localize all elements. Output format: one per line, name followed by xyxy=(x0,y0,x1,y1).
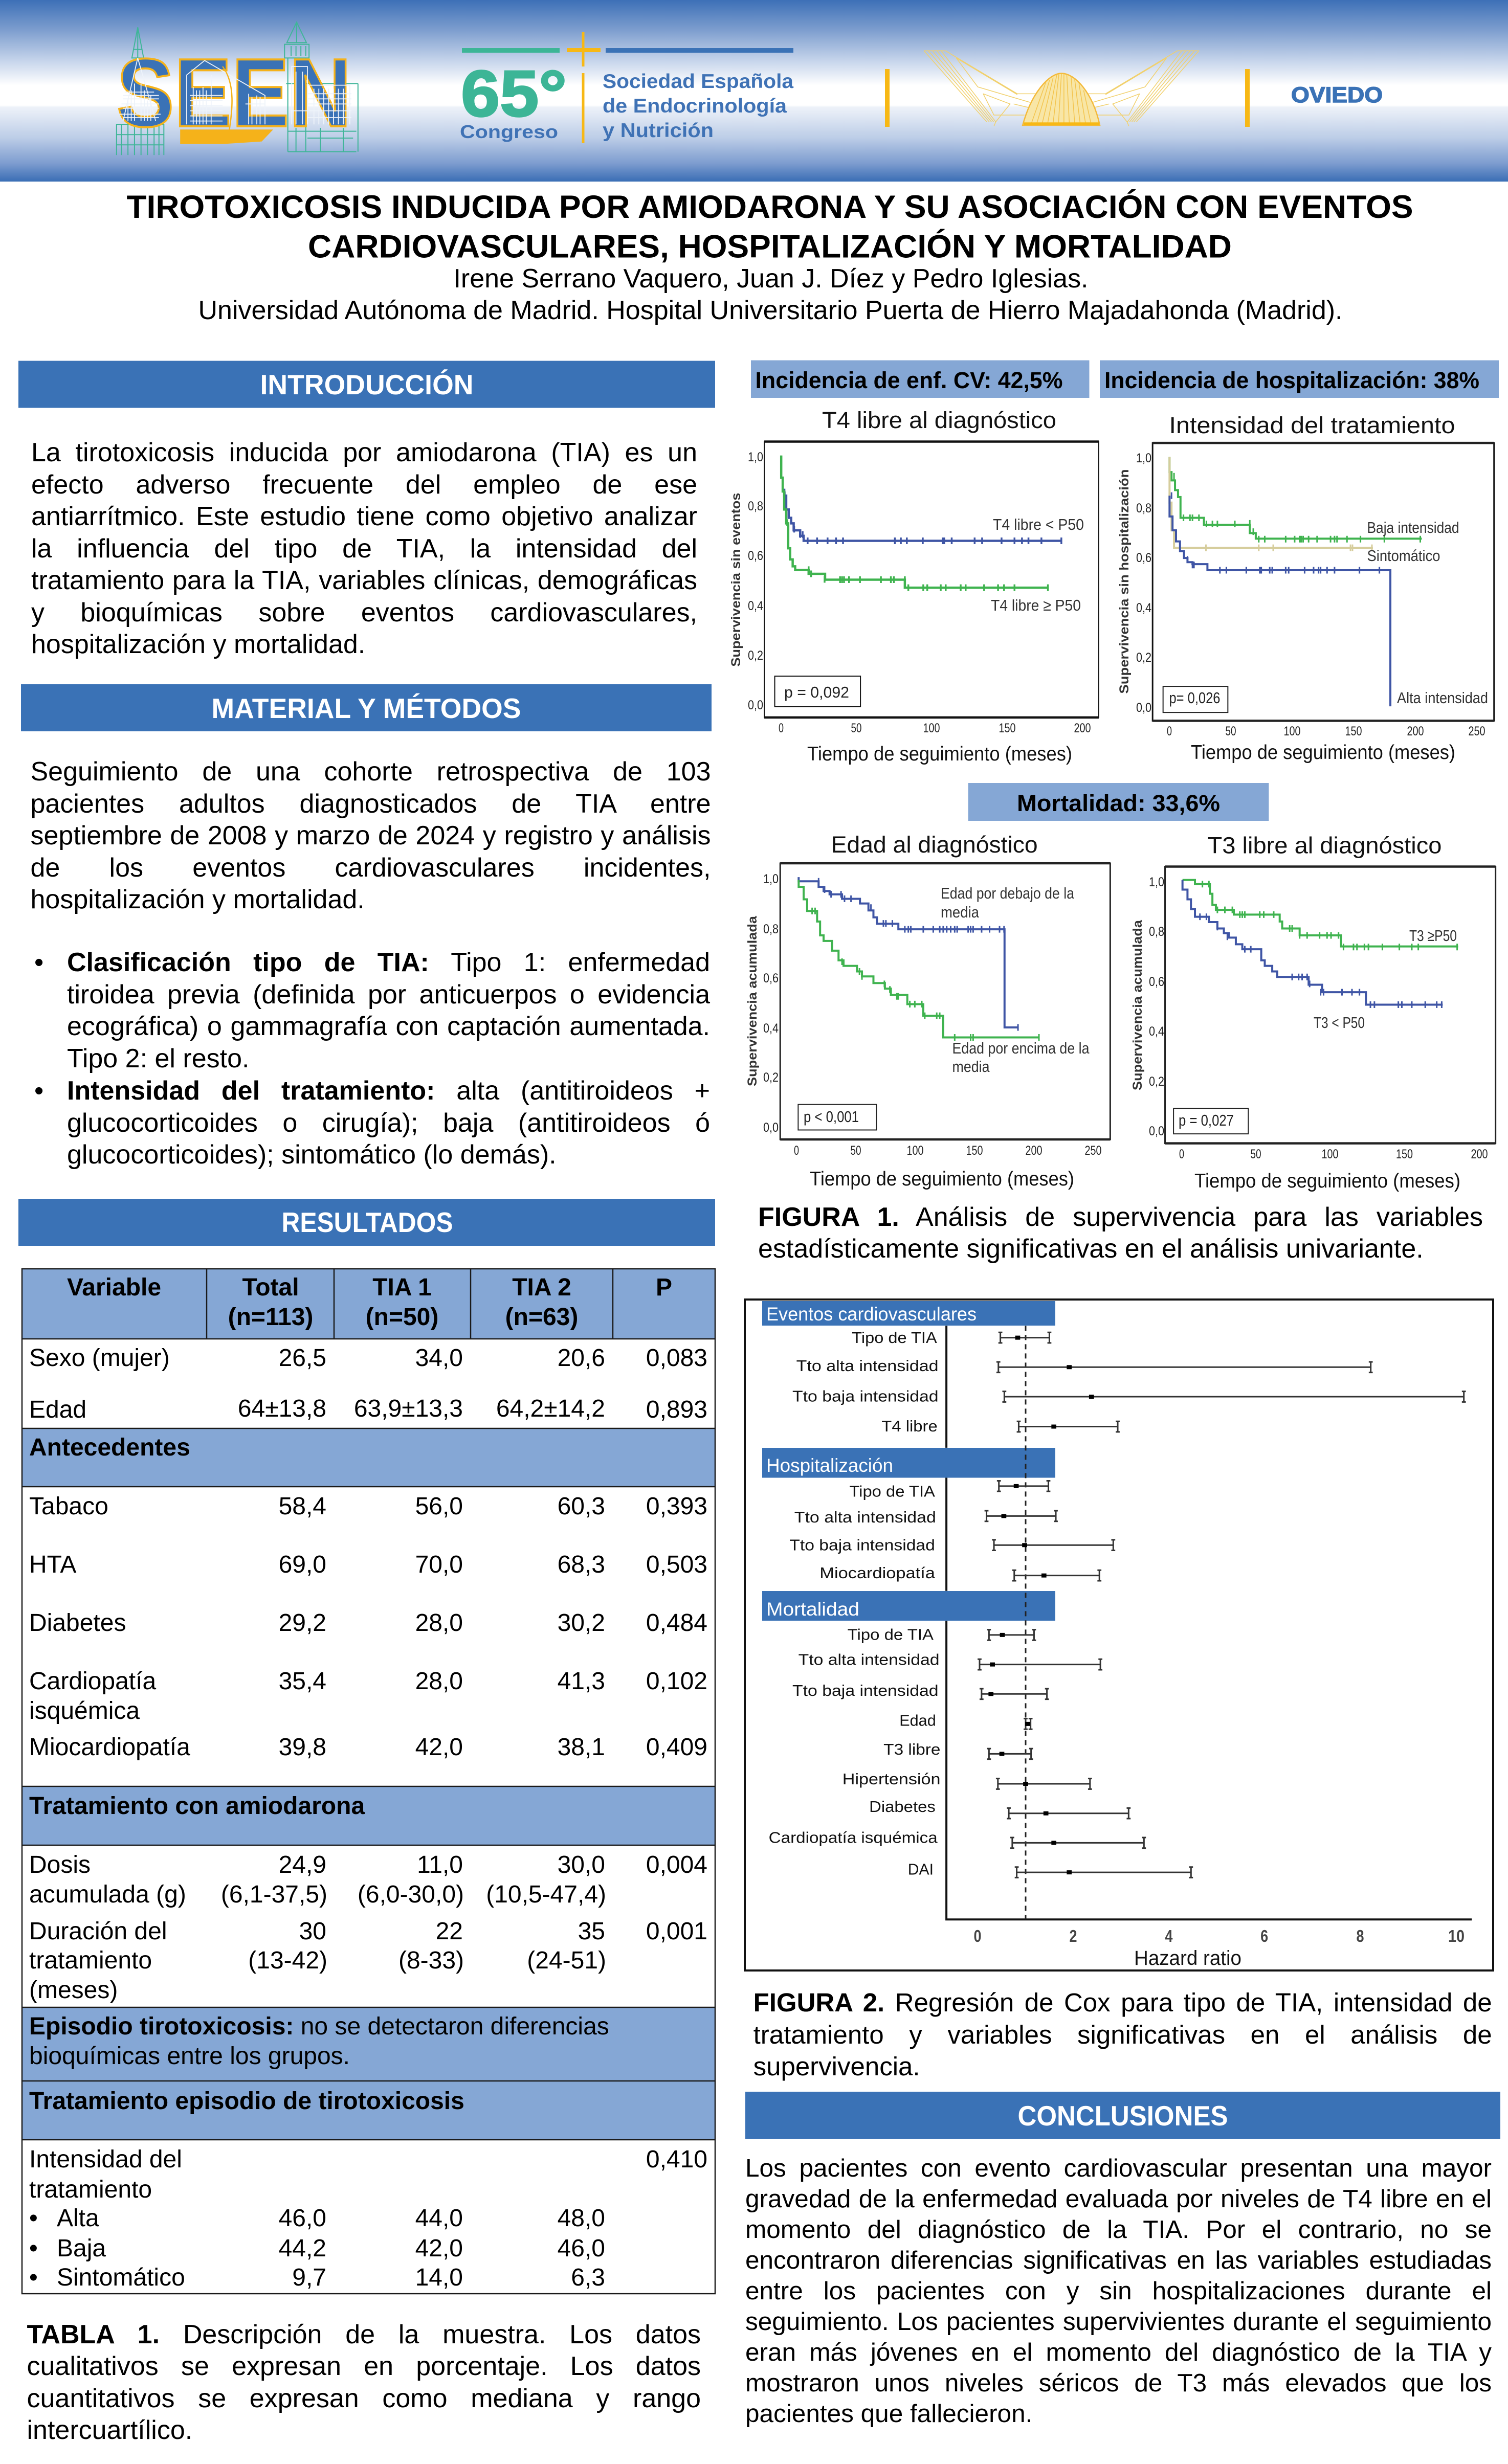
table rows: demographics: Edad xyxy=(29,1396,86,1423)
table rows: demographics: 64,2±14,2 xyxy=(496,1395,605,1422)
chart: intensidad del tratamiento: 0 xyxy=(1167,724,1172,738)
table rows: demographics: Sexo (mujer) xyxy=(29,1345,170,1372)
chart: forest plot of hazard ratios: Diabetes xyxy=(869,1798,936,1816)
chart: edad al diagnóstico: Edad por debajo de la xyxy=(941,884,1075,902)
chart: edad al diagnóstico: 150 xyxy=(966,1144,983,1158)
table rows: antecedentes: 60,3 xyxy=(558,1493,605,1520)
chart: forest plot of hazard ratios: 8 xyxy=(1357,1927,1364,1945)
text: material y métodos: Seguimiento de una cohorte retrospectiva de 103 xyxy=(31,757,711,787)
chart: edad al diagnóstico: 50 xyxy=(850,1144,861,1158)
chart: forest plot of hazard ratios: Tto alta intensidad xyxy=(794,1508,936,1526)
chart: edad al diagnóstico: Edad al diagnóstico xyxy=(831,832,1038,858)
logo: SEEN with buildings: SEEN xyxy=(117,39,351,147)
chart: intensidad del tratamiento: 150 xyxy=(1345,724,1362,738)
table rows: tratamiento con amiodarona: 24,9 xyxy=(279,1851,326,1878)
chart: forest plot of hazard ratios: 4 xyxy=(1165,1927,1173,1945)
bullet: clasificación tipo de TIA: ecográfica) o gammagrafía con captación aumentada. xyxy=(67,1012,710,1041)
text: conclusiones: seguimiento. Los pacientes supervivientes durante el seguimiento xyxy=(745,2308,1492,2336)
table rows: antecedentes: 0,484 xyxy=(646,1609,707,1637)
chart: edad al diagnóstico: 250 xyxy=(1084,1144,1102,1158)
chart: T3 libre al diagnóstico: T3 ≥P50 xyxy=(1409,927,1457,945)
chart: edad al diagnóstico: 0,6 xyxy=(763,971,779,985)
chart: intensidad del tratamiento: Sintomático xyxy=(1367,547,1440,565)
table rows: intensidad del tratamiento: Intensidad del xyxy=(29,2146,182,2173)
heading: introducción xyxy=(18,361,715,408)
table rows: antecedentes: 70,0 xyxy=(415,1551,463,1578)
chart: T4 libre al diagnóstico: T4 libre al diagnóstico xyxy=(822,407,1056,433)
table rows: antecedentes: HTA xyxy=(29,1551,76,1578)
table rows: tratamiento con amiodarona xyxy=(29,1793,707,2004)
caption: figura 1: estadísticamente significativas en el análisis univariante. xyxy=(758,1234,1424,1264)
table rows: episodio tirotoxicosis: bioquímicas entre los grupos. xyxy=(29,2043,350,2070)
heading: conclusiones xyxy=(745,2092,1500,2139)
chart: T4 libre al diagnóstico: 150 xyxy=(999,721,1016,735)
chart: T3 libre al diagnóstico: 1,0 xyxy=(1149,875,1164,889)
table rows: demographics: 20,6 xyxy=(558,1345,605,1372)
chart: edad al diagnóstico: Tiempo de seguimiento (meses) xyxy=(810,1168,1074,1190)
table rows: antecedentes: 39,8 xyxy=(279,1734,326,1761)
logo: 65 congreso: Congreso xyxy=(460,121,558,142)
table rows: antecedentes: 28,0 xyxy=(415,1609,463,1637)
chart: T4 libre al diagnóstico: 0,4 xyxy=(748,599,763,613)
heading: resultados xyxy=(18,1199,715,1246)
chart: forest plot of hazard ratios: Cardiopatía isquémica xyxy=(769,1829,938,1846)
text: conclusiones: gravedad de la enfermedad evaluada por niveles de T4 libre en el xyxy=(745,2185,1492,2213)
table rows: demographics: 64±13,8 xyxy=(238,1395,326,1422)
caption: tabla 1: TABLA 1. Descripción de la muestra. Los datos xyxy=(27,2320,701,2349)
caption: tabla 1 xyxy=(27,2320,701,2445)
table rows: intensidad del tratamiento: 44,0 xyxy=(415,2205,463,2232)
table rows: antecedentes: 56,0 xyxy=(415,1493,463,1520)
bullet: intensidad del tratamiento: Intensidad del tratamiento: alta (antitiroideos + xyxy=(67,1076,710,1106)
chart: edad al diagnóstico: 0,2 xyxy=(763,1070,779,1085)
stat box: mortalidad xyxy=(968,783,1269,821)
table rows: antecedentes: 42,0 xyxy=(415,1734,463,1761)
chart: forest plot of hazard ratios: 2 xyxy=(1069,1927,1077,1945)
table rows: tratamiento con amiodarona: acumulada (g) xyxy=(29,1881,186,1908)
chart: edad al diagnóstico: media xyxy=(941,903,980,921)
chart: T4 libre al diagnóstico: 0 xyxy=(779,721,784,735)
text: introducción: tratamiento para la TIA, variables clínicas, demográficas xyxy=(31,566,697,595)
chart: forest plot of hazard ratios: 6 xyxy=(1260,1927,1268,1945)
chart: intensidad del tratamiento: Alta intensidad xyxy=(1397,689,1488,707)
title xyxy=(127,189,1413,265)
table rows: tratamiento con amiodarona: 0,001 xyxy=(646,1918,707,1945)
chart: edad al diagnóstico: 0,4 xyxy=(763,1021,779,1036)
text: conclusiones: eran más jóvenes en el momento del diagnóstico de la TIA y xyxy=(745,2338,1492,2366)
table rows: intensidad del tratamiento: 46,0 xyxy=(558,2235,605,2262)
chart: T3 libre al diagnóstico: 0,4 xyxy=(1149,1024,1164,1039)
chart: intensidad del tratamiento: 100 xyxy=(1284,724,1300,738)
bullet: intensidad del tratamiento: glucocorticoides); sintomático (lo demás). xyxy=(67,1140,557,1170)
table rows: intensidad del tratamiento: 42,0 xyxy=(415,2235,463,2262)
table rows: tratamiento con amiodarona: (6,0-30,0) xyxy=(358,1881,464,1908)
chart: forest plot of hazard ratios: T3 libre xyxy=(883,1740,940,1758)
table rows: tratamiento con amiodarona: 30,0 xyxy=(558,1851,605,1878)
heading: introducción: INTRODUCCIÓN xyxy=(260,369,474,400)
chart: T3 libre al diagnóstico: Supervivencia acumulada xyxy=(1130,920,1145,1090)
chart: forest plot of hazard ratios: Tto alta intensidad xyxy=(796,1357,939,1375)
table rows: antecedentes: 30,2 xyxy=(558,1609,605,1637)
chart: T4 libre al diagnóstico: 200 xyxy=(1074,721,1091,735)
text: conclusiones: Los pacientes con evento cardiovascular presentan una mayor xyxy=(745,2154,1492,2182)
chart: forest plot of hazard ratios: Tto alta intensidad xyxy=(799,1651,940,1669)
chart: T3 libre al diagnóstico: 150 xyxy=(1396,1147,1413,1161)
text: material y métodos: de los eventos cardiovasculares incidentes, xyxy=(31,853,711,883)
chart: intensidad del tratamiento: 0,6 xyxy=(1136,551,1151,565)
table rows: episodio tirotoxicosis: Episodio tirotoxicosis: no se detectaron diferencias xyxy=(29,2013,609,2040)
table rows: tratamiento con amiodarona: (10,5-47,4) xyxy=(486,1881,606,1908)
text: material y métodos: septiembre de 2008 y marzo de 2024 y registro y análisis xyxy=(31,821,711,850)
table header: Variable xyxy=(67,1274,161,1301)
chart: intensidad del tratamiento: 50 xyxy=(1226,724,1236,738)
table rows: tratamiento con amiodarona: 11,0 xyxy=(417,1851,463,1878)
table rows: antecedentes: Tabaco xyxy=(29,1493,108,1520)
table header: TIA 2 xyxy=(512,1274,571,1301)
bullet: clasificación tipo de TIA: Tipo 2: el resto. xyxy=(67,1044,249,1073)
logo: OVIEDO: OVIEDO xyxy=(1291,83,1383,107)
heading: resultados: RESULTADOS xyxy=(281,1206,453,1238)
table header: P xyxy=(656,1274,672,1301)
table rows: antecedentes: Antecedentes xyxy=(29,1434,190,1461)
chart: intensidad del tratamiento: 200 xyxy=(1407,724,1424,738)
text: material y métodos xyxy=(31,757,711,914)
stat box: cardiovascular incidence xyxy=(751,360,1090,398)
heading: material y métodos xyxy=(21,684,712,731)
caption: tabla 1: cualitativos se expresan en porcentaje. Los datos xyxy=(27,2351,701,2381)
table rows: intensidad del tratamiento: Sintomático xyxy=(57,2264,185,2291)
chart: intensidad del tratamiento: Supervivencia sin hospitalización xyxy=(1117,469,1132,693)
text: material y métodos: pacientes adultos diagnosticados de TIA entre xyxy=(31,789,711,818)
group header: hospitalización xyxy=(762,1448,1055,1478)
title: TIROTOXICOSIS INDUCIDA POR AMIODARONA Y SU ASOCIACIÓN CON EVENTOS xyxy=(127,189,1413,225)
chart: T3 libre al diagnóstico: 0,2 xyxy=(1149,1074,1164,1089)
title: CARDIOVASCULARES, HOSPITALIZACIÓN Y MORTALIDAD xyxy=(308,229,1232,265)
chart: edad al diagnóstico: 1,0 xyxy=(763,872,779,886)
table rows: antecedentes: Diabetes xyxy=(29,1609,126,1637)
group header: eventos cardiovasculares: Eventos cardiovasculares xyxy=(766,1304,977,1325)
chart: T3 libre al diagnóstico: 50 xyxy=(1250,1147,1261,1161)
table rows: antecedentes: 38,1 xyxy=(558,1734,605,1761)
chart: T4 libre al diagnóstico: Tiempo de seguimiento (meses) xyxy=(807,743,1072,765)
heading: conclusiones: CONCLUSIONES xyxy=(1018,2100,1228,2132)
table rows: intensidad del tratamiento: • xyxy=(29,2205,38,2232)
group header: eventos cardiovasculares xyxy=(762,1301,1055,1326)
chart: intensidad del tratamiento: p= 0,026 xyxy=(1169,689,1221,707)
chart: T3 libre al diagnóstico: 100 xyxy=(1322,1147,1338,1161)
table rows: tratamiento con amiodarona: Dosis xyxy=(29,1851,91,1878)
chart: T3 libre al diagnóstico: 200 xyxy=(1471,1147,1488,1161)
bullet: intensidad del tratamiento: glucocorticoides o cirugía); baja (antitiroideos ó xyxy=(67,1108,710,1138)
chart: forest plot of hazard ratios: 10 xyxy=(1448,1927,1465,1945)
chart: T4 libre al diagnóstico: 1,0 xyxy=(748,450,763,464)
table rows: intensidad del tratamiento: 46,0 xyxy=(279,2205,326,2232)
chart: T3 libre al diagnóstico: 0,8 xyxy=(1149,925,1164,939)
table rows: antecedentes: 35,4 xyxy=(279,1668,326,1695)
chart: edad al diagnóstico xyxy=(745,832,1110,1190)
chart: T4 libre al diagnóstico: 0,0 xyxy=(748,698,763,712)
table rows: demographics: 0,893 xyxy=(646,1396,707,1423)
group header: mortalidad: Mortalidad xyxy=(766,1599,859,1620)
table rows: antecedentes: 0,409 xyxy=(646,1734,707,1761)
text: material y métodos: hospitalización y mortalidad. xyxy=(31,885,365,914)
logo: 65 congreso: Sociedad Española xyxy=(603,71,793,93)
text: • xyxy=(34,1076,43,1106)
authors and affiliation xyxy=(198,264,1342,325)
chart: edad al diagnóstico: media xyxy=(952,1058,990,1076)
caption: figura 1: FIGURA 1. Análisis de supervivencia para las variables xyxy=(758,1202,1483,1232)
chart: T3 libre al diagnóstico: T3 libre al diagnóstico xyxy=(1207,833,1442,858)
text: introducción: efecto adverso frecuente del empleo de ese xyxy=(31,469,697,499)
table rows: antecedentes: 68,3 xyxy=(558,1551,605,1578)
group header: mortalidad xyxy=(762,1591,1055,1621)
text: introducción: La tirotoxicosis inducida por amiodarona (TIA) es un xyxy=(31,438,697,467)
chart: edad al diagnóstico: 0,8 xyxy=(763,922,779,936)
text: introducción: y bioquímicas sobre eventos cardiovasculares, xyxy=(31,597,697,627)
text: conclusiones: entre los pacientes con y sin hospitalizaciones durante el xyxy=(745,2277,1492,2305)
chart: T4 libre al diagnóstico: 0,8 xyxy=(748,499,763,513)
table bands xyxy=(22,1428,715,2140)
chart: T4 libre al diagnóstico: 50 xyxy=(851,721,861,735)
table rows: tratamiento con amiodarona: (13-42) xyxy=(248,1947,327,1974)
table rows: antecedentes: 58,4 xyxy=(279,1493,326,1520)
caption: tabla 1: intercuartílico. xyxy=(27,2415,192,2445)
chart: T4 libre al diagnóstico: 100 xyxy=(923,721,940,735)
logo: Oviedo building xyxy=(885,51,1250,127)
text: introducción xyxy=(31,438,697,659)
chart: forest plot of hazard ratios: 0 xyxy=(974,1927,981,1945)
table rows: tratamiento con amiodarona: 35 xyxy=(578,1918,605,1945)
chart: forest plot of hazard ratios: DAI xyxy=(908,1861,934,1878)
chart: edad al diagnóstico: 100 xyxy=(906,1144,924,1158)
stat box: hospitalization incidence: Incidencia de hospitalización: 38% xyxy=(1104,367,1479,393)
table rows: antecedentes: Miocardiopatía xyxy=(29,1734,190,1761)
table rows: intensidad del tratamiento: Alta xyxy=(57,2205,99,2232)
table rows: antecedentes xyxy=(29,1434,707,1761)
table rows: intensidad del tratamiento: • xyxy=(29,2264,38,2291)
text: introducción: antiarrítmico. Este estudio tiene como objetivo analizar xyxy=(31,502,697,531)
chart: edad al diagnóstico: 0,0 xyxy=(763,1121,779,1135)
chart: forest plot of hazard ratios: Tto baja intensidad xyxy=(792,1682,939,1699)
chart: T3 libre al diagnóstico: p = 0,027 xyxy=(1179,1111,1234,1129)
table rows: tratamiento con amiodarona: (8-33) xyxy=(398,1947,464,1974)
authors and affiliation: Universidad Autónoma de Madrid. Hospital Universitario Puerta de Hierro Majadahonda (Madrid). xyxy=(198,296,1342,325)
table rows: tratamiento con amiodarona: tratamiento xyxy=(29,1947,152,1974)
table rows: antecedentes: isquémica xyxy=(29,1697,140,1724)
logo: 65 congreso: y Nutrición xyxy=(603,120,714,142)
table rows: intensidad del tratamiento: 9,7 xyxy=(292,2264,326,2291)
text: introducción: hospitalización y mortalidad. xyxy=(31,630,365,659)
chart: forest plot of hazard ratios: Tipo de TIA xyxy=(852,1329,937,1347)
bullet: intensidad del tratamiento xyxy=(34,1076,710,1170)
text: • xyxy=(34,948,43,977)
table rows: episodio tirotoxicosis xyxy=(29,2013,609,2115)
bullet: clasificación tipo de TIA: tiroidea previa (definida por anticuerpos o evidencia xyxy=(67,980,710,1010)
table rows: antecedentes: 0,503 xyxy=(646,1551,707,1578)
stat box: cardiovascular incidence: Incidencia de enf. CV: 42,5% xyxy=(755,367,1063,393)
chart: intensidad del tratamiento: Baja intensidad xyxy=(1367,519,1459,536)
chart: T3 libre al diagnóstico: 0,6 xyxy=(1149,975,1164,989)
chart: forest plot of hazard ratios: Edad xyxy=(899,1711,936,1729)
logo: 65 congreso: de Endocrinología xyxy=(603,95,787,117)
chart: T3 libre al diagnóstico: T3 < P50 xyxy=(1314,1014,1365,1032)
chart: intensidad del tratamiento: 0,0 xyxy=(1136,701,1151,715)
table rows: tratamiento con amiodarona: Tratamiento con amiodarona xyxy=(29,1793,365,1820)
chart: forest plot of hazard ratios: Miocardiopatía xyxy=(819,1564,936,1582)
chart: forest plot of hazard ratios: T4 libre xyxy=(881,1417,938,1435)
chart: T3 libre al diagnóstico xyxy=(1130,833,1496,1192)
table rows: tratamiento con amiodarona: (24-51) xyxy=(527,1947,606,1974)
chart: T4 libre al diagnóstico: Supervivencia sin eventos xyxy=(729,493,743,667)
chart: T4 libre al diagnóstico: T4 libre < P50 xyxy=(993,516,1084,533)
table rows: tratamiento con amiodarona: Duración del xyxy=(29,1918,167,1945)
table header xyxy=(22,1269,715,1339)
table rows: antecedentes: 69,0 xyxy=(279,1551,326,1578)
text: conclusiones: encontraron diferencias significativas en las variables estudiadas xyxy=(745,2246,1492,2274)
table rows: intensidad del tratamiento: 48,0 xyxy=(558,2205,605,2232)
table header: (n=50) xyxy=(366,1304,438,1331)
table rows: intensidad del tratamiento: tratamiento xyxy=(29,2176,152,2203)
chart: forest plot of hazard ratios: Tto baja intensidad xyxy=(792,1387,939,1405)
chart: intensidad del tratamiento: 250 xyxy=(1468,724,1485,738)
caption: figura 2: supervivencia. xyxy=(753,2052,920,2081)
table rows: demographics: 0,083 xyxy=(646,1345,707,1372)
chart: T4 libre al diagnóstico: T4 libre ≥ P50 xyxy=(991,596,1081,614)
table rows: demographics: 34,0 xyxy=(415,1345,463,1372)
table rows: episodio tirotoxicosis: Tratamiento episodio de tirotoxicosis xyxy=(29,2088,464,2115)
table rows: intensidad del tratamiento: 14,0 xyxy=(415,2264,463,2291)
authors and affiliation: Irene Serrano Vaquero, Juan J. Díez y Pedro Iglesias. xyxy=(453,264,1089,294)
caption: tabla 1: cuantitativos se expresan como mediana y rango xyxy=(27,2384,701,2413)
caption: figura 1 xyxy=(758,1202,1483,1264)
table 1 xyxy=(22,1269,715,2294)
table header: (n=63) xyxy=(505,1304,578,1331)
chart: forest plot of hazard ratios: Tto baja intensidad xyxy=(789,1536,935,1554)
chart: forest plot of hazard ratios: Hazard ratio xyxy=(1134,1947,1241,1969)
chart: edad al diagnóstico: Supervivencia acumulada xyxy=(745,915,760,1086)
chart: forest plot of hazard ratios xyxy=(745,1300,1493,1970)
table rows: antecedentes: 29,2 xyxy=(279,1609,326,1637)
text: conclusiones: pacientes que fallecieron. xyxy=(745,2400,1032,2428)
chart: intensidad del tratamiento: 0,2 xyxy=(1136,651,1151,665)
chart: T4 libre al diagnóstico xyxy=(729,407,1099,765)
table rows: tratamiento con amiodarona: 0,004 xyxy=(646,1851,707,1878)
chart: intensidad del tratamiento: Intensidad del tratamiento xyxy=(1169,412,1455,438)
chart: intensidad del tratamiento: 0,4 xyxy=(1136,601,1151,615)
chart: edad al diagnóstico: Edad por encima de la xyxy=(952,1039,1090,1057)
chart: T4 libre al diagnóstico: 0,6 xyxy=(748,549,763,563)
bullet: clasificación tipo de TIA xyxy=(34,948,710,1073)
chart: intensidad del tratamiento: 1,0 xyxy=(1136,451,1151,465)
chart: T3 libre al diagnóstico: 0,0 xyxy=(1149,1124,1164,1138)
caption: figura 2: tratamiento y variables significativas en el análisis de xyxy=(753,2020,1492,2049)
chart: T4 libre al diagnóstico: p = 0,092 xyxy=(784,683,849,701)
table rows: tratamiento con amiodarona: (6,1-37,5) xyxy=(221,1881,327,1908)
chart: edad al diagnóstico: 200 xyxy=(1025,1144,1043,1158)
table rows: demographics: 63,9±13,3 xyxy=(354,1395,463,1422)
table rows: antecedentes: Cardiopatía xyxy=(29,1668,156,1695)
header banner xyxy=(0,0,1508,182)
text: conclusiones xyxy=(745,2154,1492,2428)
table rows: tratamiento con amiodarona: 30 xyxy=(299,1918,326,1945)
caption: figura 2 xyxy=(753,1988,1492,2081)
chart: edad al diagnóstico: p < 0,001 xyxy=(804,1108,859,1126)
chart: forest plot of hazard ratios: Tipo de TIA xyxy=(848,1625,934,1644)
chart: intensidad del tratamiento xyxy=(1117,412,1494,764)
table header: Total xyxy=(242,1274,299,1301)
table rows: demographics xyxy=(29,1345,707,1423)
table rows: antecedentes: 41,3 xyxy=(558,1668,605,1695)
chart: edad al diagnóstico: 0 xyxy=(794,1144,799,1158)
table rows: tratamiento con amiodarona: 22 xyxy=(436,1918,463,1945)
text: conclusiones: mostraron unos niveles séricos de T3 más elevados que los xyxy=(745,2369,1492,2397)
chart: T3 libre al diagnóstico: 0 xyxy=(1179,1147,1184,1161)
chart: T3 libre al diagnóstico: Tiempo de seguimiento (meses) xyxy=(1194,1170,1460,1192)
stat box: mortalidad: Mortalidad: 33,6% xyxy=(1017,790,1220,816)
table rows: intensidad del tratamiento: 6,3 xyxy=(571,2264,605,2291)
chart: forest plot of hazard ratios: Hipertensión xyxy=(842,1770,940,1788)
table rows: antecedentes: 0,102 xyxy=(646,1668,707,1695)
bullet: clasificación tipo de TIA: Clasificación tipo de TIA: Tipo 1: enfermedad xyxy=(67,948,710,977)
logo: 65 congreso xyxy=(460,32,793,143)
text: conclusiones: momento del diagnóstico de la TIA. Por el contrario, no se xyxy=(745,2215,1492,2244)
table rows: intensidad del tratamiento: 0,410 xyxy=(646,2146,707,2173)
group header: hospitalización: Hospitalización xyxy=(766,1455,893,1476)
stat box: hospitalization incidence xyxy=(1100,360,1499,398)
table rows: intensidad del tratamiento xyxy=(29,2146,707,2291)
table rows: tratamiento con amiodarona: (meses) xyxy=(29,1977,118,2004)
chart: intensidad del tratamiento: 0,8 xyxy=(1136,501,1151,516)
chart: T4 libre al diagnóstico: 0,2 xyxy=(748,648,763,663)
text: introducción: la influencia del tipo de TIA, la intensidad del xyxy=(31,534,697,564)
caption: figura 2: FIGURA 2. Regresión de Cox para tipo de TIA, intensidad de xyxy=(753,1988,1492,2017)
chart: forest plot of hazard ratios: Tipo de TIA xyxy=(849,1482,935,1500)
table rows: intensidad del tratamiento: • xyxy=(29,2235,38,2262)
table header: (n=113) xyxy=(228,1304,313,1331)
heading: material y métodos: MATERIAL Y MÉTODOS xyxy=(212,692,521,724)
table rows: demographics: 26,5 xyxy=(279,1345,326,1372)
chart: intensidad del tratamiento: Tiempo de seguimiento (meses) xyxy=(1191,742,1455,764)
table rows: antecedentes: 28,0 xyxy=(415,1668,463,1695)
table rows: intensidad del tratamiento: 44,2 xyxy=(279,2235,326,2262)
logo: 65 congreso: 65° xyxy=(461,57,567,130)
table rows: antecedentes: 0,393 xyxy=(646,1493,707,1520)
table header: TIA 1 xyxy=(372,1274,432,1301)
table rows: intensidad del tratamiento: Baja xyxy=(57,2235,106,2262)
